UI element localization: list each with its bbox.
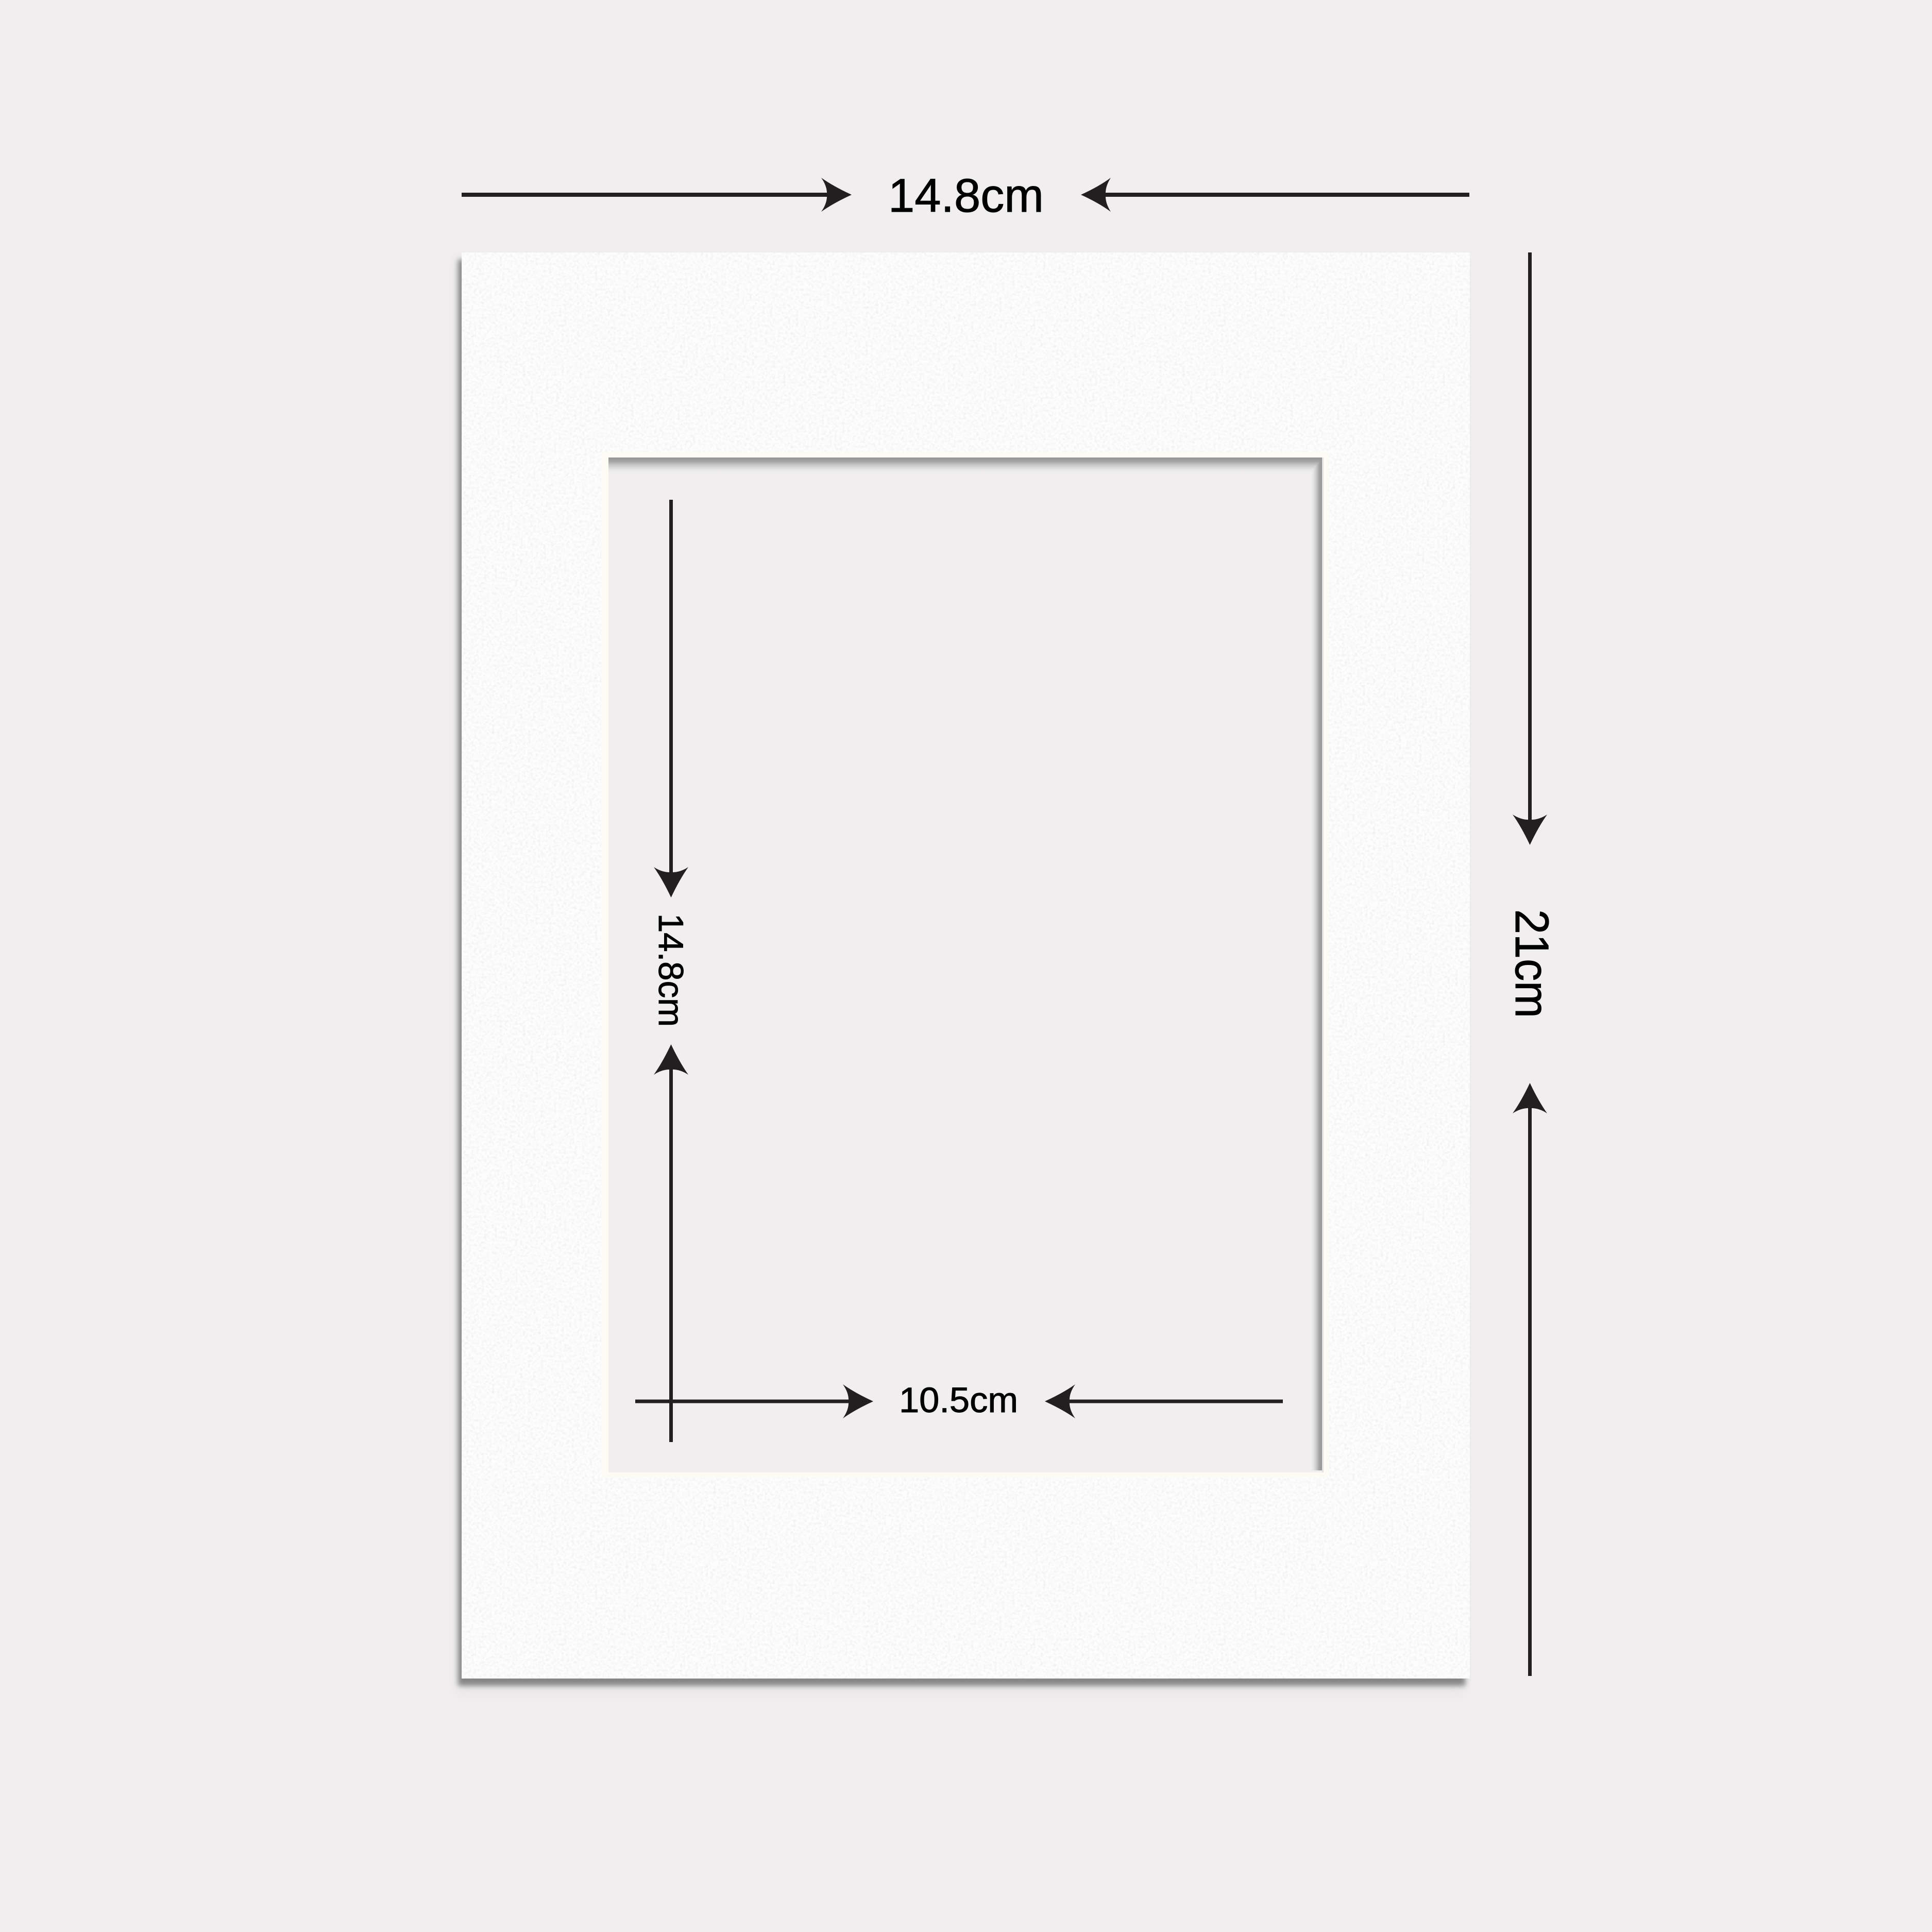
arrow: bottom pointing up: [654, 1044, 688, 1442]
window opening: [608, 457, 1324, 1472]
arrow: top pointing down: [654, 500, 688, 897]
outer width dimension: 14.8cm: [462, 170, 1469, 222]
window light edge: [1322, 457, 1324, 1472]
label: 10.5cm: 10.5cm: [899, 1380, 1018, 1420]
arrow: bottom pointing up: [1513, 1083, 1547, 1676]
mat board: [462, 252, 1470, 1679]
label: 14.8cm: 14.8cm: [651, 913, 690, 1027]
window inner shadow: top: [608, 457, 1322, 472]
arrow: right side pointing left: [1081, 178, 1469, 212]
arrow: top pointing down: [1513, 252, 1547, 845]
label: 21cm: 21cm: [1505, 909, 1558, 1018]
cream bevel edge: [601, 452, 1328, 1478]
mat drop shadow: [455, 258, 1465, 1695]
outer height dimension: 21cm: [1505, 252, 1558, 1676]
arrow: right side pointing left: [1045, 1384, 1283, 1418]
inner height dimension: 14.8cm: [651, 500, 690, 1442]
inner width dimension: 10.5cm: [635, 1380, 1283, 1420]
arrow: left side pointing right: [635, 1384, 873, 1418]
arrow: left side pointing right: [462, 178, 852, 212]
window inner shadow: right: [1311, 457, 1322, 1470]
label: 14.8cm: 14.8cm: [888, 170, 1044, 222]
panel: white photo mat: [455, 252, 1470, 1695]
